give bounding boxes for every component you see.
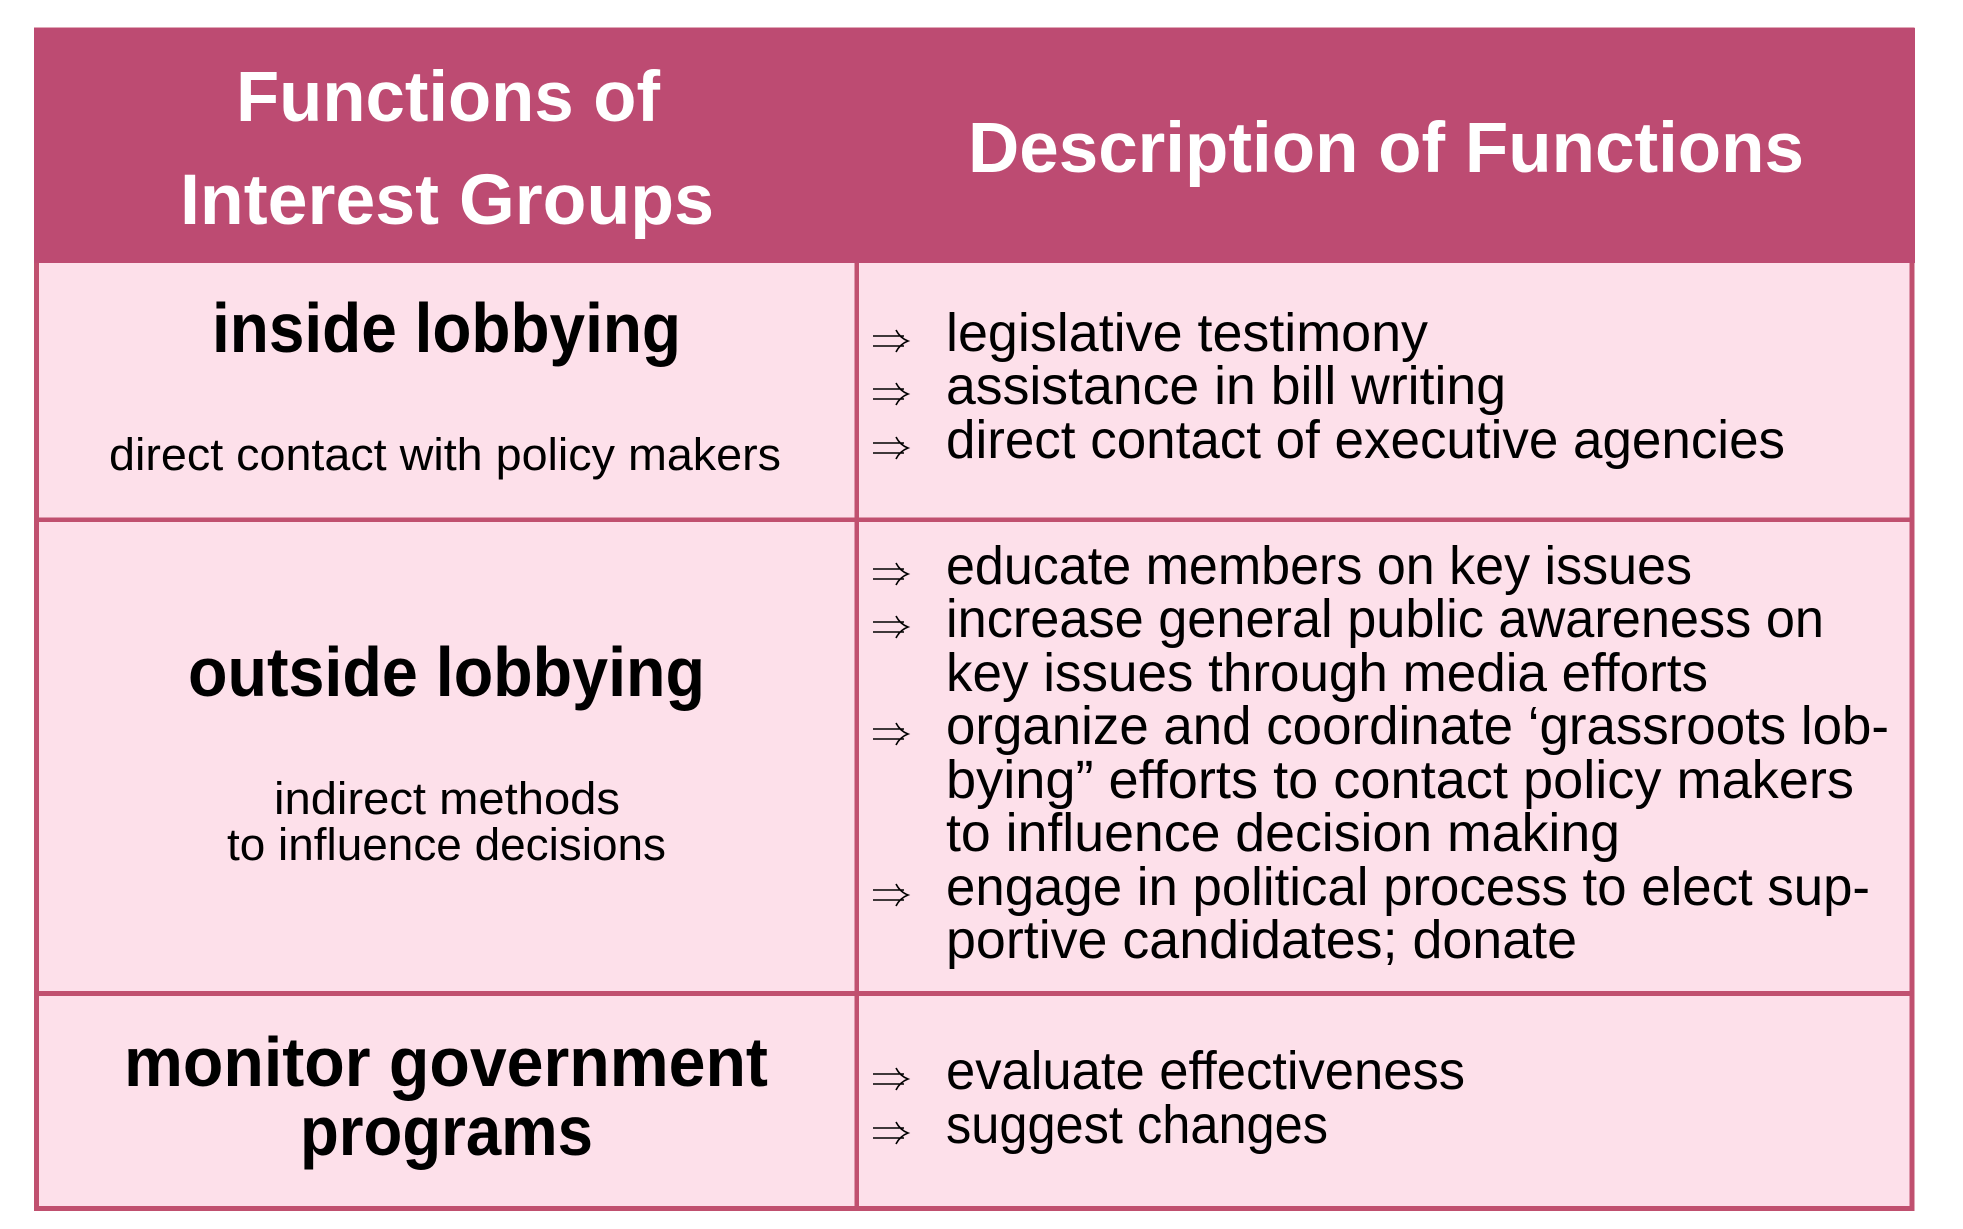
row: monitor government programs description list: evaluate effectiveness [946, 1041, 1465, 1101]
row: monitor government programs description list: suggest changes [946, 1095, 1328, 1155]
row: outside lobbying function [188, 633, 705, 870]
row: outside lobbying description list: educate members on key issues [946, 536, 1692, 596]
row: outside lobbying description list: organize and coordinate ‘grassroots lob- [946, 696, 1889, 756]
column divider [854, 262, 859, 1208]
header band [34, 28, 1915, 263]
row: inside lobbying description list: assistance in bill writing [946, 356, 1506, 416]
row: monitor government programs function [124, 1023, 768, 1170]
row divider 1 [36, 518, 1912, 522]
row: inside lobbying description list: direct contact of executive agencies [946, 410, 1785, 470]
heading: functions of interest groups: Functions of [236, 58, 660, 137]
heading: functions of interest groups [180, 58, 714, 240]
row: inside lobbying description list [873, 303, 1785, 470]
row: monitor government programs description list [873, 1041, 1465, 1155]
row: outside lobbying description list [873, 536, 1889, 970]
row: outside lobbying description list: key issues through media efforts [946, 643, 1708, 703]
row: outside lobbying description list: bying” efforts to contact policy makers [946, 750, 1854, 810]
heading: description of functions: Description of Functions [968, 109, 1804, 188]
row: inside lobbying function [109, 289, 781, 480]
row divider 2 [36, 991, 1912, 996]
row: outside lobbying function: outside lobbying [188, 633, 705, 711]
row: outside lobbying description list: to influence decision making [946, 803, 1620, 863]
row: inside lobbying function: inside lobbying [212, 289, 681, 367]
row: outside lobbying description list: portive candidates; donate [946, 910, 1577, 970]
row: outside lobbying description list: increase general public awareness on [946, 589, 1824, 649]
row: outside lobbying function: indirect methods [274, 773, 620, 824]
row: inside lobbying description list: legislative testimony [946, 303, 1428, 363]
row: outside lobbying description list: engage in political process to elect sup- [946, 857, 1870, 917]
heading: functions of interest groups: Interest Groups [180, 161, 714, 240]
row: monitor government programs function: monitor government [124, 1023, 768, 1101]
row: outside lobbying function: to influence decisions [227, 819, 666, 870]
row: monitor government programs function: programs [300, 1092, 593, 1170]
row: inside lobbying function: direct contact with policy makers [109, 429, 781, 480]
